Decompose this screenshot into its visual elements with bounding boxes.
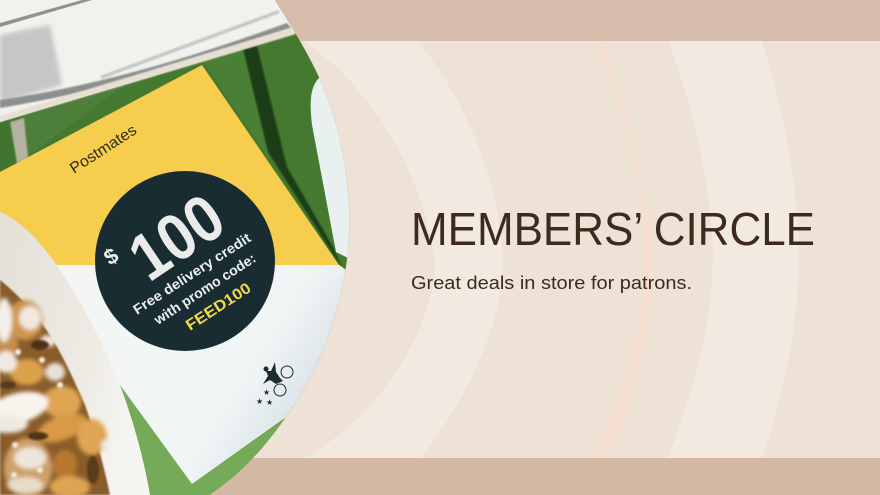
dollar sign: $ <box>99 243 123 270</box>
bottom band <box>0 458 880 495</box>
arc band: inner light <box>303 41 503 458</box>
icon: courier on bicycle with stars: ★ <box>263 388 270 397</box>
promo line 1: Free delivery credit <box>130 229 254 318</box>
card brand text: Postmates <box>67 122 140 177</box>
arc band: outer light <box>668 41 799 458</box>
table boards <box>0 46 342 495</box>
white dish edge <box>310 78 350 258</box>
card: yellow upper section <box>0 65 339 265</box>
photo: promo card and bowl <box>0 0 360 495</box>
green wooden table <box>0 0 360 495</box>
top band <box>0 0 880 41</box>
promo line 2: with promo code: <box>150 250 259 328</box>
arc band: peach <box>592 41 653 458</box>
promo code: FEED100 <box>183 280 254 334</box>
amount: 100 <box>115 179 237 295</box>
decorative arc bands <box>303 41 799 458</box>
bowl rim <box>0 212 150 495</box>
foil lid <box>0 0 296 122</box>
icon: courier on bicycle with stars <box>256 362 293 407</box>
icon: courier on bicycle with stars: ★ <box>256 397 263 406</box>
icon: courier on bicycle with stars: ★ <box>266 398 273 407</box>
promo circle <box>95 171 275 351</box>
dark gaps and crumbs <box>0 340 99 484</box>
card: white lower section <box>56 264 346 484</box>
title: MEMBERS’ CIRCLE <box>411 203 815 255</box>
food in bowl <box>0 280 110 495</box>
subtitle: Great deals in store for patrons. <box>411 273 692 293</box>
